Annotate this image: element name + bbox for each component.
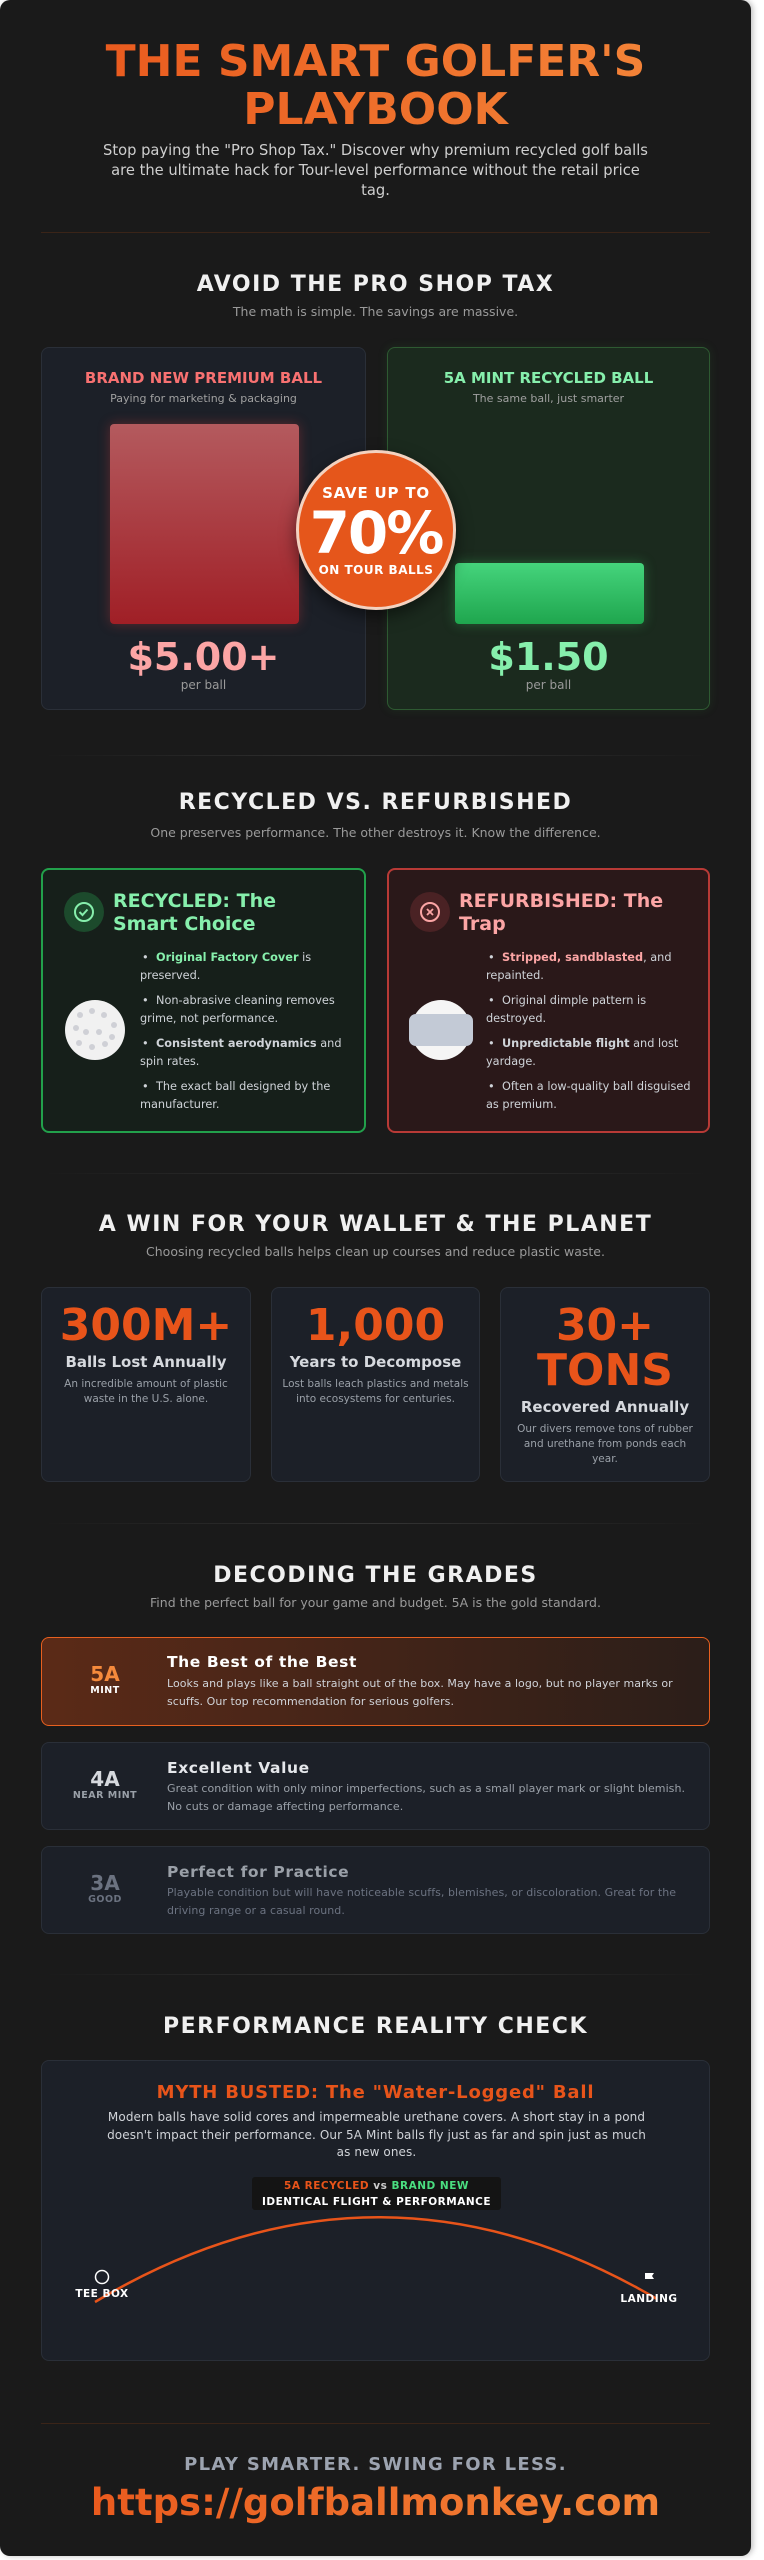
- bar: $5: [110, 424, 299, 624]
- bullet list: Original dimple pattern is destroyed.: [486, 994, 646, 1025]
- subheading: Choosing recycled balls helps clean up courses and reduce plastic waste.: [146, 1244, 605, 1259]
- heading: performance reality check: PERFORMANCE REALITY CHECK: [163, 2014, 588, 2039]
- bullet list: Unpredictable flight and lost yardage.: [486, 1037, 678, 1068]
- badge: save 70%: 70%: [310, 499, 442, 567]
- icon: clean ball: [65, 1000, 125, 1060]
- grade: 3A: [41, 1846, 710, 1934]
- stat: years: 1,000: [306, 1300, 445, 1351]
- panel: recycled ball: [387, 347, 710, 710]
- bullet list: Often a low-quality ball disguised as premium.: [486, 1080, 691, 1111]
- stat: balls lost: [41, 1287, 251, 1482]
- footer url: https://golfballmonkey.com: [91, 2481, 660, 2524]
- heading: avoid the pro shop tax: AVOID THE PRO SHOP TAX: [197, 272, 554, 297]
- per ball: per ball: [526, 678, 571, 692]
- intro text: Stop paying the "Pro Shop Tax." Discover why premium recycled golf balls are the ultimate hack for Tour-level performance without the retail price tag.: [103, 142, 648, 199]
- subheading: Find the perfect ball for your game and budget. 5A is the gold standard.: [150, 1595, 601, 1610]
- grade: 3A: Playable condition but will have noticeable scuffs, blemishes, or discoloration. Great for the driving range or a casual round.: [167, 1886, 676, 1916]
- grade: 4A: 4A: [90, 1767, 120, 1791]
- stat: balls lost: 300M+: [60, 1300, 232, 1351]
- myth text: Modern balls have solid cores and impermeable urethane covers. A short stay in a pond doesn't impact their performance. Our 5A Mint balls fly just as far and spin just as much as new ones.: [107, 2110, 646, 2159]
- stat: years: Years to Decompose: [290, 1353, 461, 1371]
- bullet list: [486, 951, 691, 1111]
- panel subtitle: Paying for marketing & packaging: [110, 392, 297, 405]
- panel: refurbished: [387, 868, 710, 1133]
- heading: wallet & planet: A WIN FOR YOUR WALLET & THE PLANET: [99, 1212, 652, 1237]
- myth title: MYTH BUSTED: The "Water-Logged" Ball: [157, 2082, 594, 2103]
- grade: 5A: 5A: [90, 1662, 120, 1686]
- flight arc chart: TEE BOX: [75, 2288, 129, 2300]
- price: $5.00+: [127, 635, 280, 679]
- card title: [459, 890, 663, 935]
- grade: 4A: NEAR MINT: [73, 1790, 137, 1801]
- footer tagline: PLAY SMARTER. SWING FOR LESS.: [184, 2454, 567, 2475]
- bullet list: Non-abrasive cleaning removes grime, not performance.: [140, 994, 335, 1025]
- badge: save 70%: [296, 450, 456, 610]
- subheading: One preserves performance. The other destroys it. Know the difference.: [150, 825, 601, 840]
- stat: balls lost: Balls Lost Annually: [65, 1353, 226, 1371]
- stat: years: Lost balls leach plastics and metals into ecosystems for centuries.: [282, 1378, 469, 1405]
- panel: myth busted: [41, 2060, 710, 2361]
- grade: 3A: Perfect for Practice: [167, 1863, 349, 1881]
- icon: x: [410, 892, 450, 932]
- icon: painted ball: [409, 1000, 473, 1060]
- bullet list: Consistent aerodynamics and spin rates.: [140, 1037, 342, 1068]
- title: [0, 38, 751, 134]
- panel: brand new ball: [41, 347, 366, 710]
- grade: 5A: Looks and plays like a ball straight out of the box. May have a logo, but no player marks or scuffs. Our top recommendation for serious golfers.: [167, 1677, 673, 1708]
- card title: [113, 890, 276, 935]
- stat: tons: Our divers remove tons of rubber and urethane from ponds each year.: [517, 1423, 693, 1465]
- grade: 3A: GOOD: [88, 1894, 122, 1905]
- price: $1.50: [488, 635, 609, 679]
- card title: Smart Choice: [113, 913, 256, 935]
- flight arc chart: [75, 2216, 678, 2305]
- badge: save 70%: SAVE UP TO: [322, 484, 430, 502]
- title: PLAYBOOK: [243, 84, 508, 135]
- grade: 4A: Great condition with only minor imperfections, such as a small player mark or slight blemish. No cuts or damage affecting performance.: [167, 1782, 685, 1812]
- bullet list: The exact ball designed by the manufacturer.: [140, 1080, 330, 1111]
- grade: 5A: [41, 1637, 710, 1726]
- card title: Trap: [459, 913, 506, 935]
- heading: recycled vs refurbished: RECYCLED VS. REFURBISHED: [179, 790, 572, 815]
- label box: IDENTICAL FLIGHT & PERFORMANCE: [262, 2196, 491, 2208]
- panel: recycled: [41, 868, 366, 1133]
- icon: check: [64, 892, 104, 932]
- grade: 5A: The Best of the Best: [167, 1653, 357, 1671]
- label box: 5A RECYCLED vs BRAND NEW: [284, 2180, 469, 2192]
- subheading: The math is simple. The savings are massive.: [233, 304, 518, 319]
- panel title: BRAND NEW PREMIUM BALL: [85, 369, 322, 387]
- stat: years: [271, 1287, 480, 1482]
- bullet list: Stripped, sandblasted, and repainted.: [486, 951, 672, 982]
- panel title: 5A MINT RECYCLED BALL: [444, 369, 653, 387]
- stat: tons: TONS: [537, 1345, 673, 1396]
- stat: tons: 30+: [556, 1300, 654, 1351]
- bullet list: [140, 951, 342, 1111]
- bullet list: Original Factory Cover is preserved.: [140, 951, 311, 982]
- stat: balls lost: An incredible amount of plastic waste in the U.S. alone.: [64, 1378, 228, 1405]
- title: THE SMART GOLFER'S: [106, 36, 645, 87]
- badge: save 70%: ON TOUR BALLS: [319, 563, 433, 577]
- grade: 4A: [41, 1742, 710, 1830]
- panel subtitle: The same ball, just smarter: [473, 392, 624, 405]
- flight arc chart: LANDING: [620, 2293, 678, 2305]
- label box: [252, 2177, 501, 2210]
- stat: tons: [500, 1287, 710, 1482]
- card title: REFURBISHED: The: [459, 890, 663, 912]
- bar: $1.50: [455, 563, 644, 624]
- stat: tons: Recovered Annually: [521, 1398, 689, 1416]
- grade: 4A: Excellent Value: [167, 1759, 310, 1777]
- grade: 5A: MINT: [90, 1685, 120, 1696]
- card title: RECYCLED: The: [113, 890, 276, 912]
- grade: 3A: 3A: [90, 1871, 120, 1895]
- per ball: per ball: [181, 678, 226, 692]
- heading: decoding the grades: DECODING THE GRADES: [213, 1563, 538, 1588]
